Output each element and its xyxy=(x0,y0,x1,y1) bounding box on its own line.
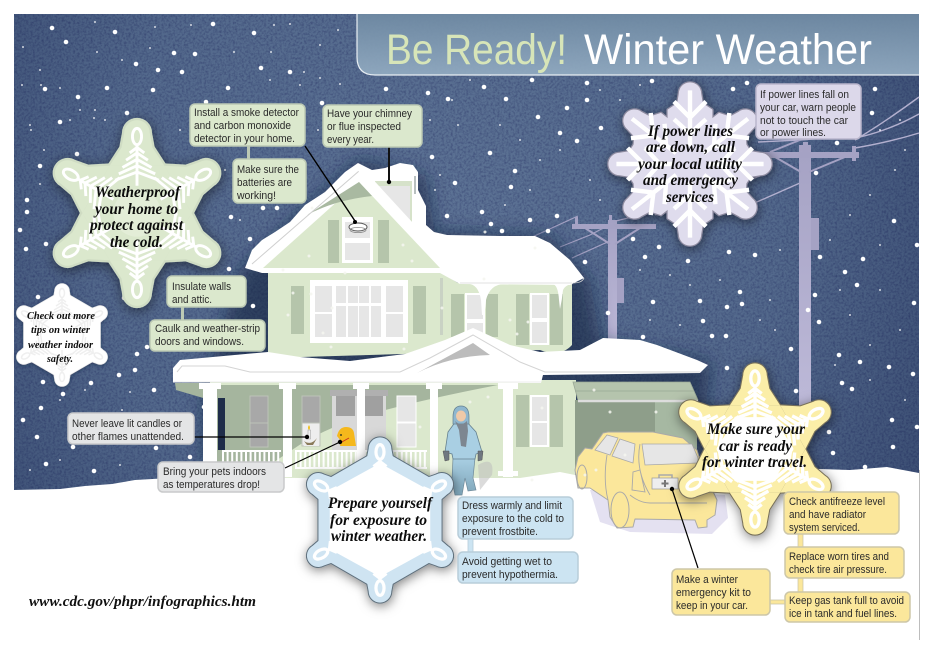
power lines heading: your local utility xyxy=(636,156,742,173)
callout: smoke detector xyxy=(190,104,305,146)
power lines heading: are down, call xyxy=(646,139,736,156)
snowflake: car ready xyxy=(668,363,842,535)
callout: caulk xyxy=(150,320,265,351)
title: Be Ready!: Be Ready! xyxy=(386,26,567,74)
house xyxy=(173,163,708,478)
snowflake: prepare yourself xyxy=(296,437,464,603)
connector lines between yellow callouts xyxy=(770,534,803,604)
person walking in winter clothes xyxy=(443,406,492,495)
connector xyxy=(247,146,250,159)
callout: chimney: or flue inspected xyxy=(327,121,401,133)
callout: gas tank xyxy=(785,592,910,622)
falling snow over house xyxy=(283,208,656,480)
upper gable xyxy=(252,171,440,268)
callout: insulate: Insulate walls xyxy=(172,281,231,293)
connector xyxy=(181,307,184,320)
callout: candles: other flames unattended. xyxy=(72,431,184,443)
callout: antifreeze xyxy=(784,492,899,534)
connector xyxy=(468,539,473,552)
falling snow, large flakes xyxy=(20,24,917,471)
check out more tips text: tips on winter xyxy=(31,325,91,336)
callout: tires: check tire air pressure. xyxy=(789,564,887,576)
callout: emergency kit: keep in your car. xyxy=(676,600,748,612)
car xyxy=(575,432,728,534)
check out more tips text xyxy=(27,311,95,365)
callout: gas tank: ice in tank and fuel lines. xyxy=(789,608,897,620)
callout: chimney: every year. xyxy=(327,134,374,146)
snowflake: power lines xyxy=(608,82,772,246)
callout: tires xyxy=(785,547,904,578)
callout: dress warmly: Dress warmly and limit xyxy=(462,500,563,512)
power lines heading: If power lines xyxy=(647,123,733,140)
weatherproof heading: Weatherproof xyxy=(95,184,182,201)
callout: batteries xyxy=(233,159,306,203)
icicles xyxy=(465,284,574,315)
callout: power lines on car: or power lines. xyxy=(760,127,826,139)
callout: batteries: working! xyxy=(236,190,276,202)
callout: candles xyxy=(68,413,194,444)
weatherproof heading: your home to xyxy=(93,201,178,218)
night sky background xyxy=(14,14,919,494)
prepare yourself heading: for exposure to xyxy=(330,512,427,529)
check out more tips text: safety. xyxy=(46,354,73,365)
car ready heading: car is ready xyxy=(719,438,792,455)
prepare yourself heading: winter weather. xyxy=(331,528,427,545)
callout: power lines on car: If power lines fall on xyxy=(760,89,849,101)
callout: avoid getting wet xyxy=(458,552,578,583)
callout: emergency kit: emergency kit to xyxy=(676,587,751,599)
candle pointer xyxy=(194,435,309,439)
prepare yourself heading xyxy=(328,495,434,545)
car ready heading: for winter travel. xyxy=(702,454,807,471)
weatherproof heading: the cold. xyxy=(110,234,163,251)
weatherproof heading: protect against xyxy=(88,217,184,234)
callout: avoid getting wet: prevent hypothermia. xyxy=(462,569,558,581)
callout: chimney xyxy=(323,105,422,147)
callout: avoid getting wet: Avoid getting wet to xyxy=(462,556,552,568)
callout: dress warmly xyxy=(458,497,573,539)
porch railing xyxy=(222,451,427,468)
callout: power lines on car: not to touch the car xyxy=(760,115,848,127)
snow on the ground xyxy=(0,462,919,655)
porch windows and door xyxy=(250,390,563,451)
first aid kit pointer xyxy=(670,487,698,568)
car ready heading: Make sure your xyxy=(706,421,806,438)
power lines heading xyxy=(636,123,742,206)
check out more tips text: weather indoor xyxy=(28,340,94,351)
title banner xyxy=(357,14,919,75)
car ready heading xyxy=(702,421,807,471)
ground snow mound in front of the house xyxy=(228,470,700,495)
callout: smoke detector: detector in your home. xyxy=(194,133,295,145)
callout: tires: Replace worn tires and xyxy=(789,551,889,563)
callout: insulate: and attic. xyxy=(172,294,212,306)
porch shade xyxy=(217,385,498,478)
callout: power lines on car xyxy=(756,84,861,139)
house wall: second floor and wing xyxy=(268,272,572,358)
roof snow xyxy=(245,163,584,285)
website url: www.cdc.gov/phpr/infographics.htm xyxy=(29,594,256,610)
callout: pets xyxy=(158,462,284,492)
callout: batteries: batteries are xyxy=(237,177,292,189)
porch wall xyxy=(210,380,576,478)
chimney xyxy=(375,176,416,226)
roof outlines xyxy=(359,168,463,281)
right page border xyxy=(918,470,920,640)
power lines heading: and emergency xyxy=(643,172,738,189)
utility pole: large, with wires xyxy=(750,97,919,407)
callout: batteries: Make sure the xyxy=(237,164,299,176)
callout: pets: as temperatures drop! xyxy=(163,479,260,491)
callout: dress warmly: prevent frostbite. xyxy=(462,526,538,538)
callout: smoke detector: Install a smoke detector xyxy=(194,107,299,119)
icon: smoke detector xyxy=(349,220,367,233)
callout: caulk: doors and windows. xyxy=(155,336,244,348)
weatherproof heading xyxy=(88,184,184,251)
check out more tips text: Check out more xyxy=(27,311,95,322)
callout: antifreeze: Check antifreeze level xyxy=(789,496,885,508)
callout: gas tank: Keep gas tank full to avoid xyxy=(789,595,904,607)
prepare yourself heading: Prepare yourself xyxy=(328,495,434,512)
callout: smoke detector: and carbon monoxide xyxy=(194,120,291,132)
callout: emergency kit: Make a winter xyxy=(676,574,738,586)
callout: power lines on car: your car, warn people xyxy=(760,102,856,114)
smoke detector pointer xyxy=(305,146,355,221)
callout: antifreeze: system serviced. xyxy=(789,522,860,534)
callout: insulate xyxy=(167,276,246,307)
second floor windows xyxy=(291,278,443,343)
callout: caulk: Caulk and weather-strip xyxy=(155,323,260,335)
snowflake: weatherproof your home xyxy=(43,120,231,306)
callout: chimney: Have your chimney xyxy=(327,108,412,120)
utility pole: small, with wires xyxy=(530,176,760,345)
callout: emergency kit xyxy=(672,569,770,615)
wing windows xyxy=(451,293,563,345)
chimney pointer xyxy=(387,147,391,184)
dark doorway at left of porch xyxy=(218,398,225,450)
first aid kit xyxy=(652,475,678,489)
candle xyxy=(304,424,319,446)
callout: antifreeze: and have radiator xyxy=(789,509,866,521)
garage xyxy=(573,382,698,478)
falling snow, small flakes xyxy=(22,22,905,470)
callout: dress warmly: exposure to the cold to xyxy=(462,513,564,525)
power lines heading: services xyxy=(665,189,714,206)
pet pointer xyxy=(285,440,342,468)
callout: candles: Never leave lit candles or xyxy=(72,418,182,430)
porch columns xyxy=(199,383,518,477)
dog xyxy=(337,427,356,446)
title: Winter Weather: Winter Weather xyxy=(584,26,872,74)
shadow of house on sky xyxy=(205,160,710,470)
callout: pets: Bring your pets indoors xyxy=(163,466,266,478)
snowflake: check out more tips xyxy=(10,284,114,386)
porch roof with snow xyxy=(173,328,708,383)
